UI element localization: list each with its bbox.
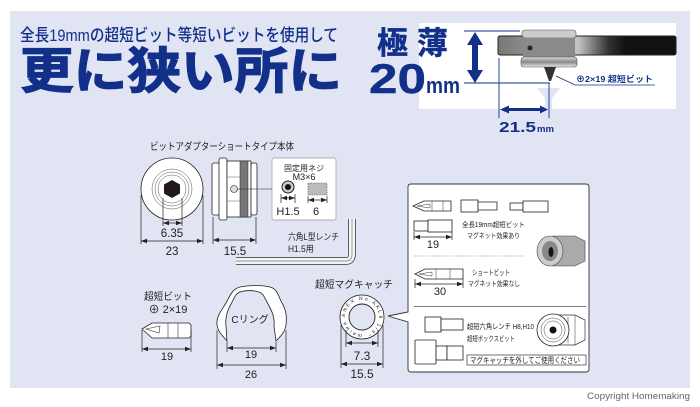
bit: 30mm short bit: 30 (434, 286, 446, 298)
subtitle: 全長19mmの超短ビット等短いビットを使用して (20, 26, 338, 45)
main heading: 更に狭い所に (20, 45, 342, 99)
text: hex wrench and box bits (467, 321, 534, 343)
set screw box: 固定用ネジ (284, 164, 324, 173)
magnet catch (315, 278, 393, 381)
short bit (142, 290, 192, 363)
callout box: compatible bits (388, 184, 589, 372)
text: hex wrench and box bits: 超短ボックスビット (467, 334, 515, 343)
adapter front view: 23 (166, 246, 178, 258)
width dimension 21.5mm: mm (537, 124, 554, 135)
bits: 19mm ultra-short group (413, 200, 548, 251)
width dimension 21.5mm: 21.5 (499, 119, 536, 136)
photo panel: wrench side view (419, 23, 676, 109)
note box: マグキャッチを外してご使用ください (470, 355, 580, 365)
text: hex wrench and box bits: 超短六角レンチ H8,H10 (467, 321, 534, 331)
bit: hex wrench bit (425, 317, 463, 332)
C ring: Cリング (231, 313, 269, 326)
adapter front view: 6.35 (161, 228, 183, 240)
C ring (217, 286, 286, 381)
short bit: 19 (161, 351, 173, 363)
text: short bits (468, 268, 520, 288)
wrench label: H1.5用 (288, 244, 314, 254)
hex L wrench (236, 219, 352, 261)
text: ultra-short bits: マグネット効果あり (467, 231, 520, 240)
photo: magnet catch attached, top (537, 236, 585, 266)
wrench label: 六角L型レンチ (288, 231, 339, 242)
copyright: Copyright Homemaking (587, 391, 690, 401)
magnet catch: 15.5 (350, 367, 374, 381)
drawing: magnet catch attached, bottom (537, 314, 585, 346)
width dimension 21.5mm (499, 58, 560, 136)
wrench label (288, 231, 339, 254)
magnet catch: meiwa ANEX No.AKL9 1/4" (342, 296, 382, 337)
magnet catch: 7.3 (354, 349, 371, 363)
heading: 20mm: mm (426, 73, 460, 98)
heading: 20mm: 20 (369, 55, 426, 102)
photo: wrench handle (498, 36, 676, 55)
photo: ratchet head (521, 30, 577, 81)
C ring: 26 (245, 369, 257, 381)
bit: box bit (415, 340, 463, 364)
bits: 19mm ultra-short group: 19 (427, 239, 439, 251)
short bit: ⊕ 2×19 (149, 304, 187, 316)
C ring: 19 (245, 349, 257, 361)
adapter front view (141, 158, 203, 258)
text: ultra-short bits (462, 220, 525, 240)
bit: 30mm short bit (415, 269, 463, 298)
magnet catch: 超短マグキャッチ (315, 278, 393, 291)
callout: bit label: ⊕2×19 超短ビット (576, 74, 653, 84)
set screw box: M3×6 (293, 172, 315, 182)
adapter side view: 15.5 (224, 246, 246, 258)
adapter side view (212, 158, 272, 258)
heading: 20mm (369, 55, 460, 102)
short bit: 超短ビット (144, 290, 192, 303)
callout: bit label (556, 74, 655, 85)
set screw box: H1.5 (276, 206, 300, 218)
set screw box: 6 (313, 206, 319, 218)
text: short bits: マグネット効果なし (468, 279, 520, 288)
heading: adapter body: ビットアダプターショートタイプ本体 (150, 140, 294, 153)
set screw box (272, 158, 336, 220)
text: short bits: ショートビット (472, 268, 510, 277)
text: ultra-short bits: 全長19mm超短ビット (462, 220, 525, 229)
heading: 極薄: 極 薄 (377, 26, 448, 61)
height dimension arrow (464, 31, 550, 83)
